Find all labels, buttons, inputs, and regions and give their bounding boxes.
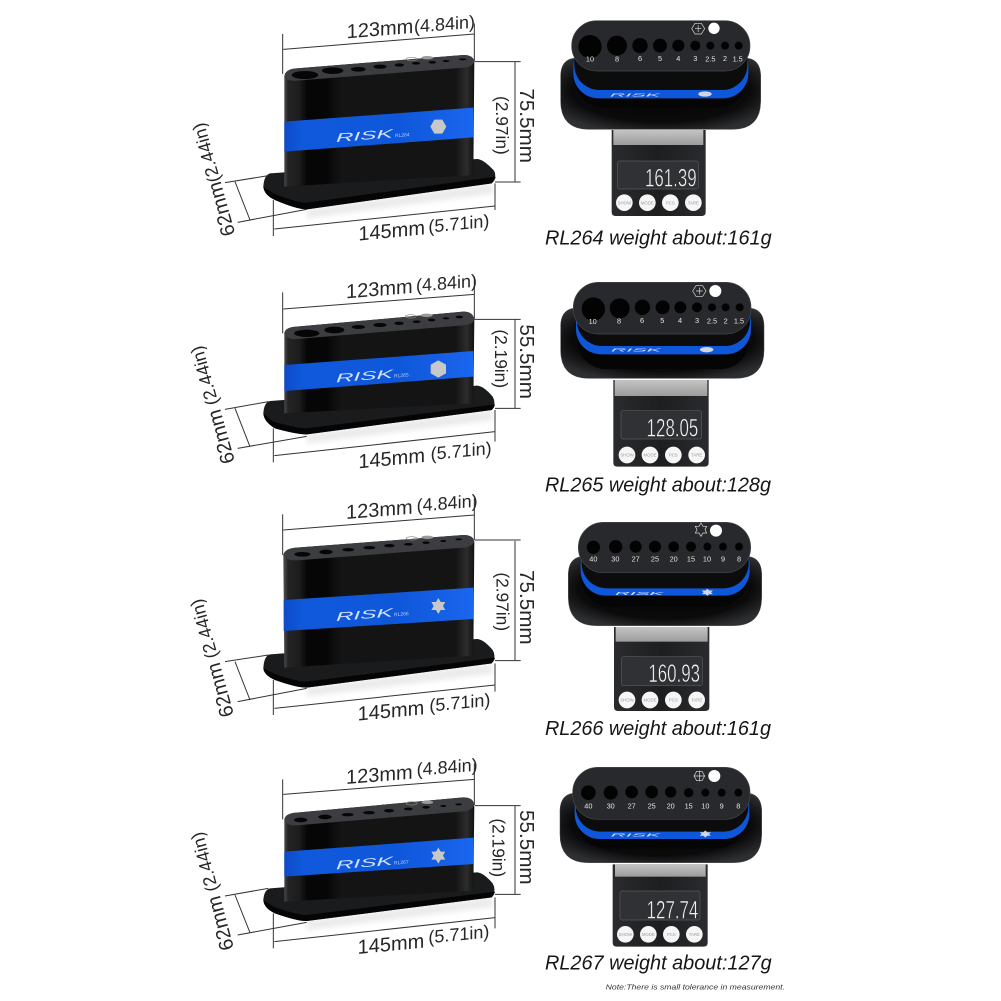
top face with holes: 1.5 bbox=[733, 55, 743, 64]
holder body bbox=[581, 532, 750, 607]
dimension: 123mm bbox=[283, 491, 478, 555]
scale bbox=[614, 627, 709, 711]
top face with holes: 4 bbox=[678, 316, 682, 325]
top face with holes: 10 bbox=[701, 801, 709, 810]
top face with holes: 27 bbox=[632, 555, 640, 564]
dimension: 123mm: 123mm bbox=[346, 276, 413, 303]
scale: MODE bbox=[643, 698, 657, 703]
dimension: 75.5mm bbox=[475, 540, 538, 661]
hex icon bbox=[430, 120, 446, 134]
dimension: 123mm bbox=[283, 271, 477, 333]
dimension: 123mm: (4.84in) bbox=[417, 755, 478, 780]
dimension: 62mm: 62mm (2.44in) bbox=[186, 343, 240, 466]
scale: 160.93 bbox=[648, 660, 700, 688]
top face with holes: 15 bbox=[687, 555, 695, 564]
dimension: 55.5mm: (2.19in) bbox=[489, 818, 509, 877]
top face with holes: 30 bbox=[607, 801, 615, 810]
RISK logo: RISK bbox=[336, 367, 395, 385]
tool holder body bbox=[284, 797, 474, 902]
scale: MODE bbox=[642, 932, 655, 937]
top face with holes: 2.5 bbox=[705, 55, 715, 64]
dimension: 123mm bbox=[283, 755, 478, 819]
RISK logo: RISK bbox=[336, 854, 395, 872]
holder body bbox=[575, 775, 749, 848]
panel: RL267 dimension view bbox=[186, 755, 538, 959]
top face with holes bbox=[284, 55, 474, 81]
star icon bbox=[431, 598, 445, 614]
caption: RL264 weight about:161g bbox=[545, 226, 772, 249]
top face with holes: 8 bbox=[617, 317, 621, 326]
top face with holes: 40 bbox=[584, 801, 592, 810]
top face with holes: 10 bbox=[703, 555, 711, 564]
holder body bbox=[573, 33, 748, 107]
top face with holes bbox=[572, 21, 750, 71]
dimension: 145mm: (5.71in) bbox=[428, 211, 489, 237]
panel: RL265 dimension view bbox=[186, 271, 538, 473]
base plate bbox=[263, 386, 495, 443]
dimension: 123mm: (4.84in) bbox=[417, 491, 478, 516]
blue band bbox=[284, 108, 473, 152]
top face with holes: 15 bbox=[685, 801, 693, 810]
top face with holes bbox=[573, 282, 751, 334]
star icon bbox=[431, 848, 445, 864]
blue band bbox=[284, 838, 474, 877]
top face with holes: 1.5 bbox=[734, 316, 744, 325]
dimension: 145mm: 145mm bbox=[358, 217, 425, 246]
top face with holes: 25 bbox=[651, 555, 659, 564]
scale bbox=[613, 380, 709, 467]
scale: PCS bbox=[669, 698, 678, 703]
panel: RL264 dimension view bbox=[188, 12, 538, 246]
top face with holes: 9 bbox=[721, 555, 725, 564]
panel: RL265 scale view bbox=[545, 282, 771, 497]
dimension: 75.5mm: (2.97in) bbox=[493, 572, 513, 631]
dimension: 62mm: 62mm (2.44in) bbox=[186, 596, 239, 719]
panel: RL266 dimension view bbox=[186, 491, 538, 726]
dimension: 75.5mm bbox=[475, 62, 538, 182]
dimension: 55.5mm: (2.19in) bbox=[491, 329, 511, 388]
blue band bbox=[284, 588, 474, 631]
RISK logo: RISK bbox=[615, 591, 666, 597]
dimension: 145mm: 145mm bbox=[358, 445, 425, 473]
dimension: 62mm bbox=[188, 120, 307, 239]
caption: RL265 weight about:128g bbox=[545, 474, 771, 497]
RISK logo: RISK bbox=[611, 833, 663, 839]
top face with holes: 20 bbox=[667, 801, 675, 810]
star icon bbox=[702, 589, 713, 596]
dimension: 62mm: 62mm (2.44in) bbox=[186, 830, 239, 953]
dimension: 123mm: 123mm bbox=[347, 16, 413, 43]
base plate bbox=[560, 793, 762, 863]
scale: SHOW bbox=[620, 698, 635, 703]
scale bbox=[613, 864, 708, 947]
tool holder body bbox=[284, 312, 474, 413]
RISK logo: RISK bbox=[611, 348, 664, 354]
RISK logo: RISK bbox=[610, 93, 663, 99]
dimension: 75.5mm: 75.5mm bbox=[515, 570, 538, 645]
model number: RL265 bbox=[394, 372, 409, 380]
base plate bbox=[568, 557, 762, 626]
hex icon bbox=[700, 347, 713, 352]
dimension: 145mm bbox=[273, 410, 495, 473]
dimension: 145mm bbox=[273, 183, 495, 246]
dimension: 145mm: 145mm bbox=[358, 697, 424, 726]
model number: RL264 bbox=[395, 132, 410, 139]
tool holder body bbox=[283, 535, 474, 668]
base plate bbox=[263, 872, 495, 930]
RISK logo: RISK bbox=[336, 126, 395, 145]
dimension: 55.5mm bbox=[475, 319, 538, 408]
top face with holes: 10 bbox=[586, 55, 594, 64]
caption: RL267 weight about:127g bbox=[545, 951, 772, 974]
dimension: 123mm bbox=[283, 12, 475, 74]
top face with holes: 6 bbox=[638, 54, 642, 63]
blue band bbox=[284, 351, 473, 391]
dimension: 62mm: 62mm(2.44in) bbox=[188, 120, 240, 239]
dimension: 55.5mm: 55.5mm bbox=[515, 324, 538, 399]
top face with holes: 40 bbox=[589, 555, 597, 564]
top face with holes: 5 bbox=[660, 316, 664, 325]
top face with holes: 5 bbox=[658, 54, 662, 63]
top face with holes: 25 bbox=[648, 801, 656, 810]
top face with holes bbox=[284, 312, 474, 339]
scale: TARE bbox=[689, 932, 700, 937]
panel: RL267 scale view bbox=[545, 767, 785, 991]
scale: PCS bbox=[666, 200, 675, 205]
top face with holes: 8 bbox=[736, 801, 740, 810]
scale: MODE bbox=[641, 200, 654, 205]
top face with holes bbox=[283, 535, 474, 560]
top face with holes: 2 bbox=[723, 54, 727, 63]
dimension: 123mm: 123mm bbox=[346, 762, 413, 789]
top face with holes: 8 bbox=[615, 55, 619, 64]
dimension: 55.5mm bbox=[475, 806, 538, 894]
scale: PCS bbox=[667, 932, 676, 937]
dimension: 145mm: (5.71in) bbox=[431, 438, 492, 464]
scale: PCS bbox=[669, 453, 678, 458]
top face with holes: 3 bbox=[695, 316, 699, 325]
base plate bbox=[263, 639, 495, 697]
dimension: 145mm bbox=[273, 897, 495, 959]
dimension: 62mm bbox=[186, 343, 307, 466]
top face with holes: 30 bbox=[611, 555, 619, 564]
top face with holes: 8 bbox=[737, 555, 741, 564]
dimension: 145mm: (5.71in) bbox=[428, 921, 489, 947]
dimension: 55.5mm: 55.5mm bbox=[515, 810, 538, 885]
top face with holes bbox=[284, 797, 474, 825]
scale: SHOW bbox=[620, 453, 635, 458]
top face with holes bbox=[578, 522, 751, 573]
top face with holes: 2 bbox=[724, 316, 728, 325]
scale bbox=[612, 130, 706, 216]
dimension: 62mm bbox=[186, 596, 307, 719]
top face with holes: 4 bbox=[676, 54, 680, 63]
scale: SHOW bbox=[618, 200, 632, 205]
dimension: 75.5mm: (2.97in) bbox=[492, 96, 512, 155]
tool holder body bbox=[284, 55, 474, 187]
base plate bbox=[561, 308, 764, 378]
dimension: 62mm bbox=[186, 830, 307, 953]
panel: RL264 scale view bbox=[545, 21, 772, 249]
holder body bbox=[576, 289, 751, 369]
model number: RL267 bbox=[394, 859, 409, 867]
top face with holes bbox=[573, 767, 750, 819]
caption: RL266 weight about:161g bbox=[545, 717, 771, 740]
RISK logo: RISK bbox=[336, 605, 395, 624]
scale: TARE bbox=[691, 698, 702, 703]
base plate bbox=[561, 58, 761, 129]
dimension: 145mm: (5.71in) bbox=[429, 690, 490, 716]
top face with holes: 27 bbox=[628, 801, 636, 810]
scale: SHOW bbox=[619, 932, 633, 937]
scale: 127.74 bbox=[647, 896, 698, 924]
scale: MODE bbox=[643, 453, 657, 458]
scale: TARE bbox=[691, 453, 702, 458]
scale: 128.05 bbox=[647, 415, 698, 443]
model number: RL266 bbox=[394, 611, 409, 618]
dimension: 123mm: (4.84in) bbox=[416, 271, 477, 296]
top face with holes: 20 bbox=[670, 555, 678, 564]
dimension: 145mm: 145mm bbox=[358, 931, 424, 959]
hex icon bbox=[698, 91, 712, 97]
measurement note: Note:There is small tolerance in measurement. bbox=[606, 982, 785, 991]
scale: TARE bbox=[688, 200, 699, 205]
top face with holes: 6 bbox=[640, 316, 644, 325]
dimension: 75.5mm: 75.5mm bbox=[515, 88, 538, 163]
top face with holes: 2.5 bbox=[707, 316, 717, 325]
dimension: 123mm: 123mm bbox=[346, 497, 413, 524]
scale: 161.39 bbox=[645, 165, 697, 193]
dimension: 145mm bbox=[273, 663, 495, 726]
dimension: 123mm: (4.84in) bbox=[414, 12, 475, 37]
hex icon bbox=[431, 360, 446, 378]
base plate bbox=[263, 159, 496, 218]
star icon bbox=[700, 830, 711, 838]
panel: RL266 scale view bbox=[545, 522, 771, 740]
top face with holes: 3 bbox=[693, 54, 697, 63]
top face with holes: 9 bbox=[720, 801, 724, 810]
top face with holes: 10 bbox=[589, 317, 597, 326]
